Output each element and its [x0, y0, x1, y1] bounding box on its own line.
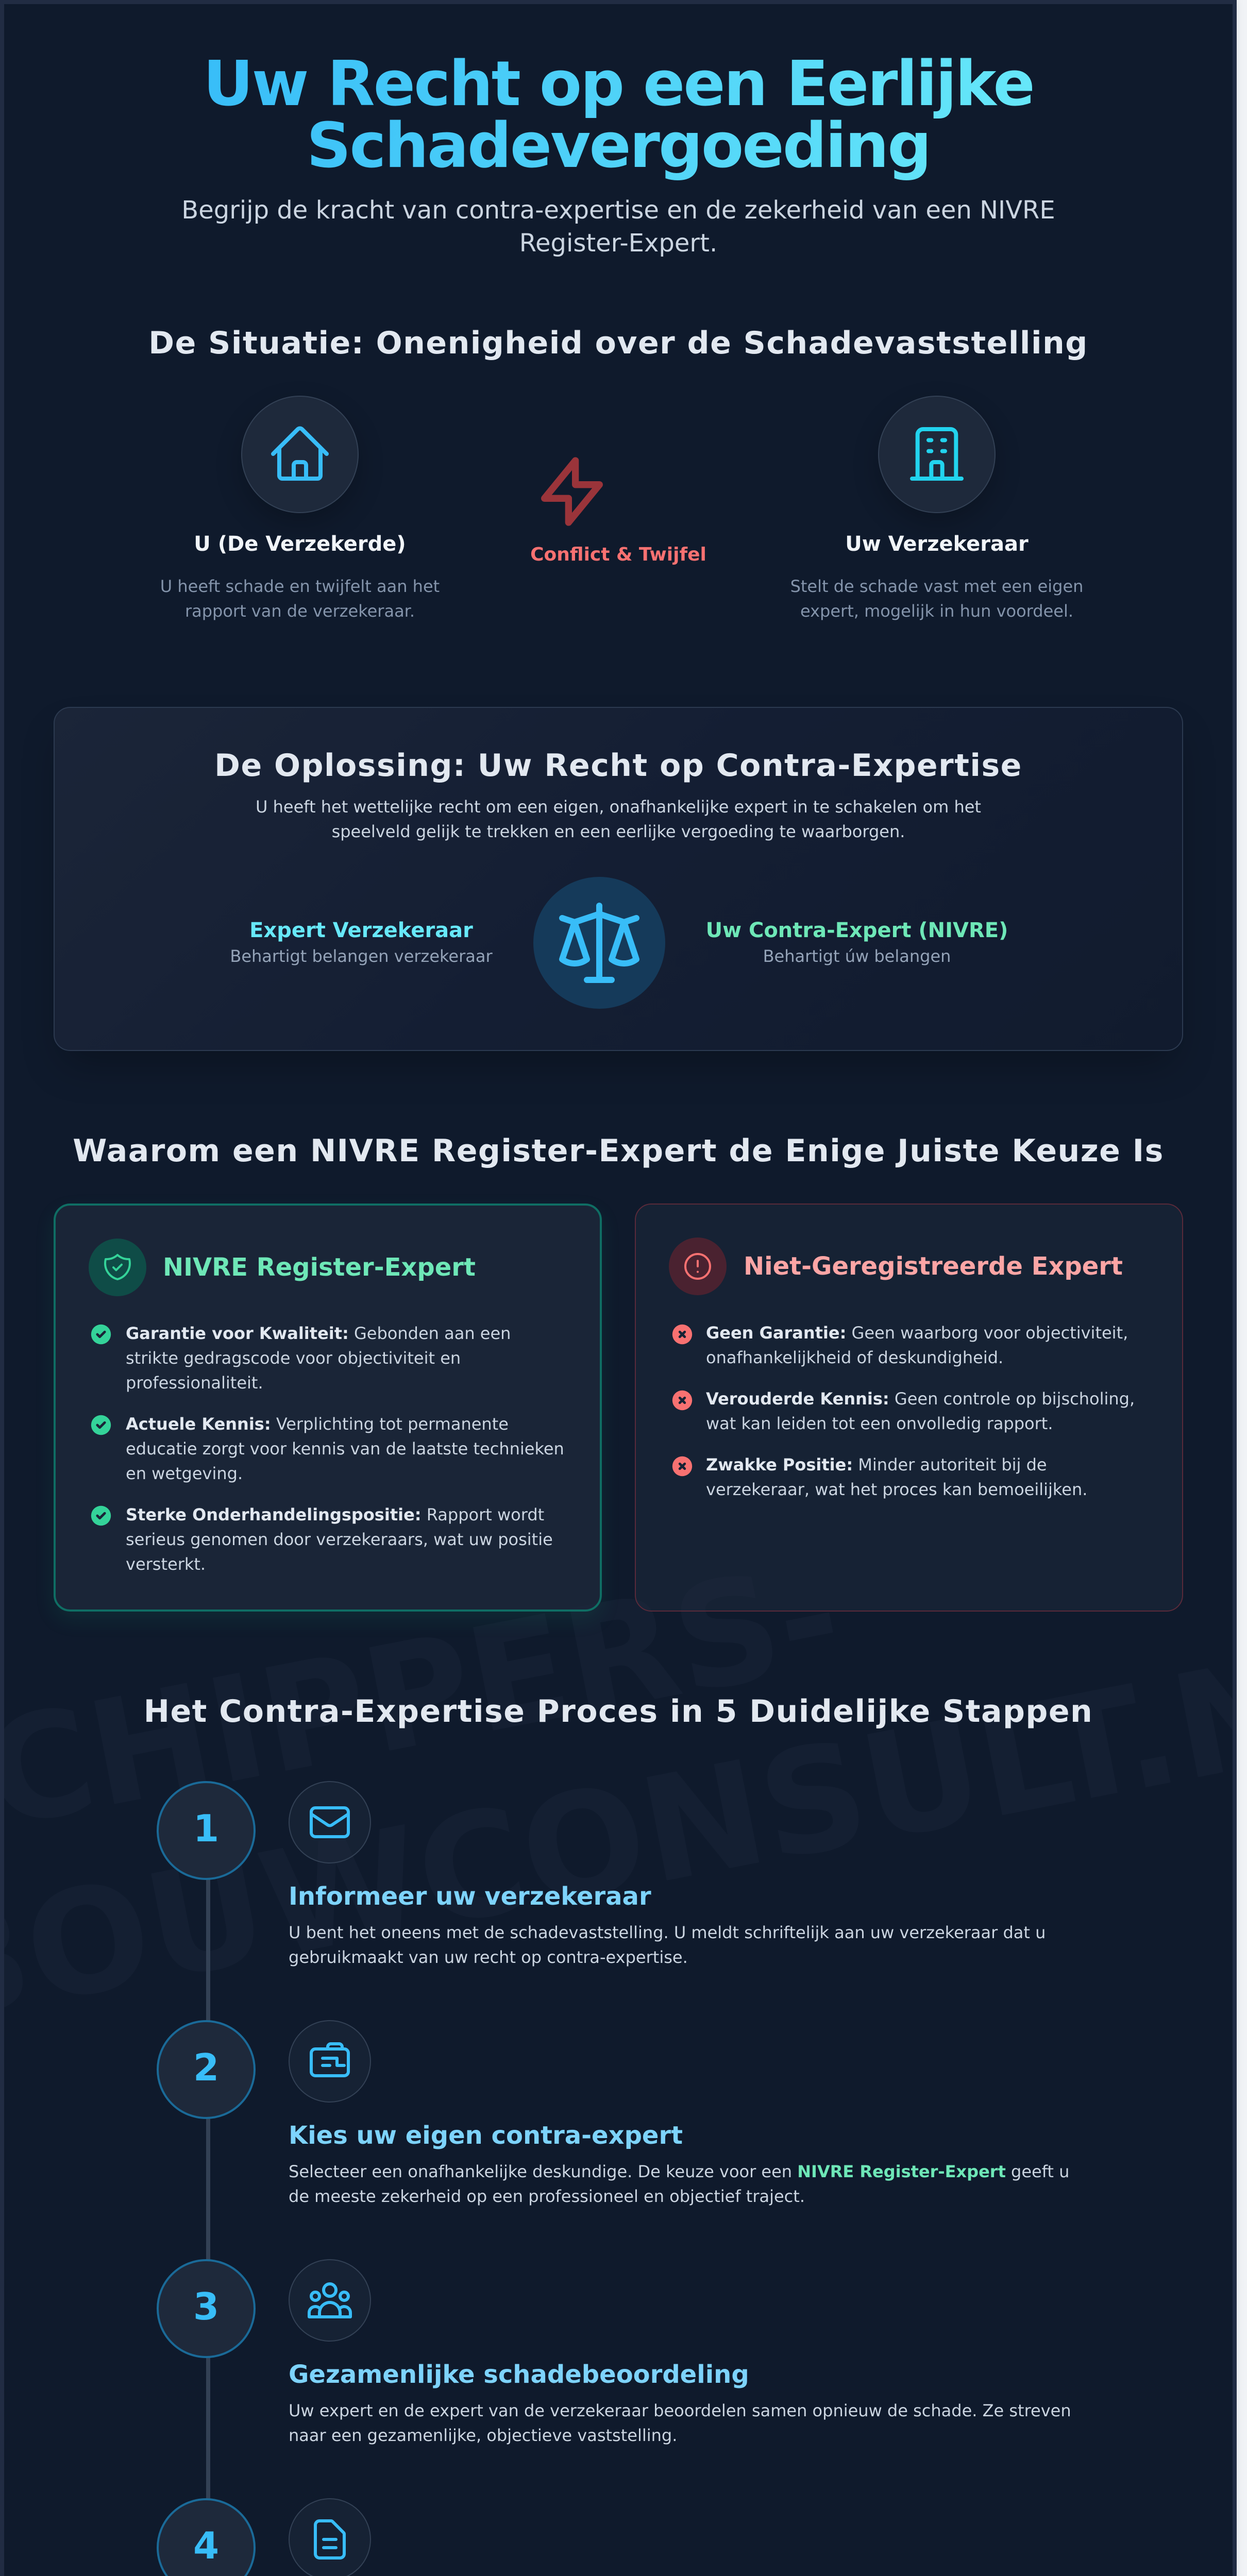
step description: Uw expert en de expert van de verzekeraar beoordelen samen opnieuw de schade. Ze streven — [289, 2401, 1071, 2420]
label: contra expert — [706, 919, 1008, 966]
panel: solution — [54, 707, 1183, 1051]
step text — [289, 2121, 1069, 2206]
step text — [289, 1882, 1046, 1967]
text: solution — [256, 797, 981, 841]
step number: 1 — [193, 1807, 219, 1850]
text: solution: U heeft het wettelijke recht om een eigen, onafhankelijke expert in te schakelen om het — [256, 797, 981, 817]
list item — [91, 1505, 553, 1574]
step number — [157, 2498, 256, 2576]
label: insurer expert — [230, 919, 493, 966]
panel: situation — [160, 396, 1083, 621]
step description — [289, 2401, 1071, 2445]
step description: naar een gezamenlijke, objectieve vaststelling. — [289, 2426, 677, 2445]
list item — [672, 1389, 1135, 1433]
icon: envelope — [289, 1781, 371, 1863]
list item: Actuele Kennis: Verplichting tot permanente — [126, 1414, 509, 1434]
subtitle: Register-Expert. — [519, 229, 717, 258]
step number — [157, 2259, 256, 2358]
list item: wat kan leiden tot een onvolledig rapport. — [706, 1414, 1053, 1433]
step heading: Kies uw eigen contra-expert — [289, 2121, 683, 2150]
step description: de meeste zekerheid op een professioneel en objectief traject. — [289, 2187, 805, 2206]
step number: 4 — [193, 2524, 219, 2567]
step number — [157, 2020, 256, 2119]
step description — [289, 2162, 1069, 2206]
text: insurer — [790, 577, 1083, 621]
step heading: Gezamenlijke schadebeoordeling — [289, 2360, 749, 2389]
heading: unregistered: Niet-Geregistreerde Expert — [744, 1252, 1123, 1281]
step 1 — [157, 1781, 1046, 1967]
list item: serieus genomen door verzekeraars, wat uw positie — [126, 1530, 553, 1549]
list item: Zwakke Positie: Minder autoriteit bij de — [706, 1455, 1047, 1475]
icon: warning — [669, 1238, 727, 1295]
list item — [91, 1414, 564, 1483]
list item — [91, 1324, 511, 1393]
list item: en wetgeving. — [126, 1464, 243, 1483]
name: Expert Verzekeraar — [249, 919, 473, 942]
label: insurer: Uw Verzekeraar — [845, 532, 1029, 556]
list item: Sterke Onderhandelingspositie: Rapport wordt — [126, 1505, 544, 1524]
step number: 3 — [193, 2285, 219, 2328]
heading: process: Het Contra-Expertise Proces in 5 Duidelijke Stappen — [144, 1693, 1093, 1730]
list item: strikte gedragscode voor objectiviteit en — [126, 1348, 461, 1368]
step 4 — [0, 2498, 1237, 2576]
list item: Verouderde Kennis: Geen controle op bijscholing, — [706, 1389, 1135, 1409]
step text — [289, 2360, 1071, 2445]
list item: onafhankelijkheid of deskundigheid. — [706, 1348, 1003, 1367]
title — [203, 48, 1034, 182]
text: solution: speelveld gelijk te trekken en een eerlijke vergoeding te waarborgen. — [332, 822, 905, 841]
panel: NIVRE expert — [54, 1204, 602, 1612]
timeline line — [206, 1855, 210, 2576]
icon: document — [289, 2498, 371, 2576]
list item: verzekeraar, wat het proces kan bemoeilijken. — [706, 1480, 1087, 1499]
watermark — [0, 1425, 1247, 2063]
subtitle: Begrijp de kracht van contra-expertise en de zekerheid van een NIVRE — [181, 196, 1055, 225]
name: Uw Contra-Expert (NIVRE) — [706, 919, 1008, 942]
list item: professionaliteit. — [126, 1373, 263, 1393]
icon: group — [289, 2259, 371, 2342]
label: conflict: Conflict & Twijfel — [530, 544, 706, 565]
step description: gebruikmaakt van uw recht op contra-expertise. — [289, 1947, 688, 1967]
role: Behartigt úw belangen — [763, 946, 951, 966]
step description — [289, 1923, 1046, 1967]
list item: educatie zorgt voor kennis van de laatste technieken — [126, 1439, 564, 1459]
icon: shield — [89, 1239, 146, 1296]
step description: Selecteer een onafhankelijke deskundige. De keuze voor een NIVRE Register-Expert geeft u — [289, 2162, 1069, 2181]
list item — [672, 1323, 1128, 1367]
text: insurer: expert, mogelijk in hun voordeel. — [800, 601, 1073, 621]
heading: solution: De Oplossing: Uw Recht op Contra-Expertise — [214, 748, 1022, 784]
heading: NIVRE: NIVRE Register-Expert — [163, 1253, 476, 1282]
step 2 — [157, 2020, 1069, 2206]
step heading: Informeer uw verzekeraar — [289, 1882, 651, 1911]
role: Behartigt belangen verzekeraar — [230, 946, 493, 966]
icon: lightning bolt — [541, 457, 603, 526]
step number: 2 — [193, 2046, 219, 2089]
list item: Garantie voor Kwaliteit: Gebonden aan een — [126, 1324, 511, 1343]
step description: U bent het oneens met de schadevaststelling. U meldt schriftelijk aan uw verzekeraar dat u — [289, 1923, 1046, 1942]
text: insurer: Stelt de schade vast met een eigen — [790, 577, 1083, 596]
label: insured: U (De Verzekerde) — [194, 532, 406, 556]
list item — [672, 1455, 1087, 1499]
list item: versterkt. — [126, 1554, 206, 1574]
panel: unregistered expert — [635, 1204, 1183, 1612]
text: insured: U heeft schade en twijfelt aan het — [160, 577, 440, 596]
heading: situation: De Situatie: Onenigheid over de Schadevaststelling — [148, 325, 1088, 361]
text: insured: rapport van de verzekeraar. — [185, 601, 415, 621]
subtitle — [181, 196, 1055, 258]
list item: Geen Garantie: Geen waarborg voor objectiviteit, — [706, 1323, 1128, 1343]
icon: house — [241, 396, 359, 513]
icon: scales — [533, 877, 665, 1009]
title: Schadevergoeding — [307, 110, 930, 182]
heading: why NIVRE: Waarom een NIVRE Register-Expert de Enige Juiste Keuze Is — [73, 1133, 1164, 1169]
step number — [157, 1781, 256, 1880]
title: Uw Recht op een Eerlijke — [203, 48, 1034, 120]
icon: building — [878, 396, 996, 513]
text: insured — [160, 577, 440, 621]
icon: briefcase — [289, 2020, 371, 2103]
step 3 — [157, 2259, 1071, 2445]
